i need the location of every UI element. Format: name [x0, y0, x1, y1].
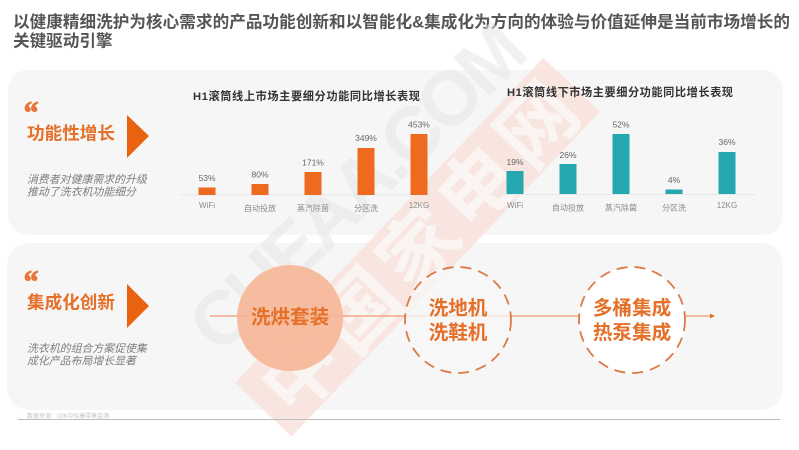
categories: WiFi: [199, 201, 215, 210]
values: [198, 120, 430, 183]
values: 52%: [612, 120, 630, 130]
circle: floor and shoe washers: [405, 267, 511, 373]
categories: [199, 201, 429, 213]
categories: 自动投放: [552, 202, 584, 212]
watermark: CHEAA.COM: [173, 6, 543, 368]
chart title: H1滚筒线下市场主要细分功能同比增长表现: [507, 85, 733, 99]
values: 26%: [559, 150, 577, 160]
watermark: 中国家电网: [243, 67, 596, 432]
description: 推动了洗衣机功能细分: [27, 186, 137, 198]
icon: quote mark: “: [22, 263, 38, 299]
circle: washer dryer set: 洗烘套装: [251, 306, 330, 328]
circle: washer dryer set: [237, 265, 343, 371]
categories: 蒸汽除菌: [297, 203, 329, 213]
circle: multi-drum and heat pump: 热泵集成: [593, 321, 671, 344]
values: 171%: [302, 158, 324, 168]
values: 53%: [198, 173, 216, 183]
arrow: triangle: [127, 115, 149, 158]
values: 4%: [668, 175, 681, 185]
values: 453%: [408, 120, 430, 130]
description: [27, 173, 148, 198]
circle: multi-drum and heat pump: 多桶集成: [593, 296, 671, 320]
chart title: H1滚筒线上市场主要细分功能同比增长表现: [193, 89, 420, 103]
bars: [198, 134, 428, 195]
categories: 分区洗: [662, 202, 686, 212]
circle: multi-drum and heat pump: [579, 267, 685, 373]
circle: floor and shoe washers: 洗鞋机: [429, 322, 488, 344]
categories: 分区洗: [354, 203, 378, 213]
chart: online market growth: [180, 89, 440, 213]
panel: functional growth background: [8, 70, 783, 235]
values: [506, 120, 736, 185]
panel: integrated innovation label: [22, 263, 149, 368]
chart: offline market growth: [490, 85, 756, 212]
panel: functional growth label: [22, 94, 149, 198]
title: [13, 12, 790, 50]
categories: 12KG: [717, 201, 737, 210]
description: [27, 342, 148, 368]
values: 349%: [355, 133, 377, 143]
title: 以健康精细洗护为核心需求的产品功能创新和以智能化&集成化为方向的体验与价值延伸是当前市场增长的: [13, 12, 790, 32]
icon: quote mark: “: [22, 94, 38, 130]
categories: 蒸汽除菌: [605, 202, 637, 212]
heading: integrated innovation: 集成化创新: [27, 292, 115, 312]
description: 洗衣机的组合方案促使集: [27, 342, 148, 355]
arrow: triangle: [127, 284, 149, 328]
values: 19%: [506, 157, 524, 167]
categories: 自动投放: [244, 203, 276, 213]
categories: WiFi: [507, 201, 523, 210]
values: 80%: [251, 170, 269, 180]
source note: 数据来源：GfK中怡康零售监测: [27, 412, 109, 420]
footer rule: [18, 418, 780, 420]
timeline connector arrow: [210, 314, 715, 318]
categories: [507, 201, 737, 212]
values: 36%: [718, 137, 736, 147]
title: 关键驱动引擎: [13, 32, 113, 50]
description: 消费者对健康需求的升级: [27, 173, 148, 186]
categories: 12KG: [409, 201, 429, 210]
panel: integrated innovation background: [7, 243, 783, 410]
circle: floor and shoe washers: 洗地机: [429, 298, 488, 320]
heading: functional growth: 功能性增长: [27, 124, 115, 144]
description: 成化产品布局增长显著: [27, 354, 138, 368]
bars: [506, 134, 736, 194]
